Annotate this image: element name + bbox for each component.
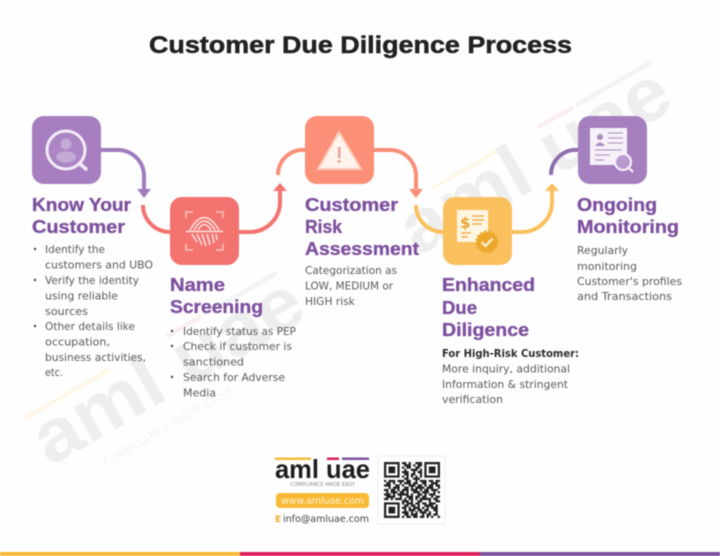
bullet list: sources [45,306,88,318]
connector: into ongoing monitoring [551,150,578,175]
heading: Screening [170,296,263,317]
heading [170,274,263,317]
bullet list: Search for Adverse [183,372,285,384]
bullet list: etc. [45,367,63,379]
description: Categorization as [305,265,397,277]
description [577,245,682,303]
arrow: risk assessment to enhanced due diligence [278,150,423,198]
bullet list: occupation, [45,336,110,348]
panel: customer risk assessment [305,116,419,308]
bullet list: business activities, [45,352,146,364]
bullet list: Identify status as PEP [183,326,296,338]
description: LOW, MEDIUM or [305,280,394,292]
title: Customer Due Diligence Process [149,32,572,59]
footer logo: aml uae: COMPLIANCE MADE EASY [290,482,356,488]
heading: Customer [32,216,125,237]
icon: warning triangle [305,116,374,184]
panel: enhanced due diligence [442,197,579,406]
bullet list [171,326,296,400]
heading: Enhanced [442,274,535,295]
heading: Know Your [32,194,131,215]
heading: Ongoing [577,194,657,215]
watermark: lower left: COMPLIANCE MADE EASY [101,384,235,469]
heading: Assessment [305,238,419,259]
arrow: know your customer to name screening [101,150,151,198]
heading: Risk [305,216,343,237]
icon: fingerprint scan [170,197,239,265]
heading [32,194,131,237]
bullet list: using reliable [45,290,118,302]
heading: Diligence [442,319,529,340]
panel: know your customer [32,116,153,379]
description: Regularly [577,245,628,257]
email: E [275,515,281,525]
website pill [276,493,369,508]
icon: document with badge [443,197,512,265]
website pill: www.amluae.com [281,496,364,507]
description [442,348,579,406]
bullet list: Other details like [45,321,135,333]
description: and Transactions [577,291,672,303]
icon: magnifier with person [32,116,101,184]
description: monitoring [577,261,637,273]
panel: name screening [170,197,296,400]
description: Customer's profiles [577,276,682,288]
heading: Monitoring [577,216,679,237]
heading [577,194,679,237]
icon: profile document with magnifier [578,116,647,184]
bullet list: Verify the identity [45,275,139,287]
heading [442,274,535,340]
qr code [378,456,445,524]
bullet list: customers and UBO [45,260,153,272]
watermark: upper right: aml uae [383,48,685,271]
bullet list: Check if customer is [183,341,292,353]
panel: ongoing monitoring [577,116,682,303]
bullet list: Identify the [45,244,105,256]
description: For High-Risk Customer: [442,348,579,360]
bottom colour bar [0,552,720,556]
footer logo: aml uae: aml uae [275,454,370,484]
heading: Name [170,274,225,295]
description: Information & stringent [442,379,568,391]
bullet list: Media [183,388,216,400]
arrow: name screening to risk assessment [143,183,287,232]
heading: Due [442,297,477,318]
heading [305,194,419,259]
heading: Customer [305,194,398,215]
bullet list [34,244,153,379]
description: HIGH risk [305,296,355,308]
description [305,265,397,308]
description: verification [442,394,503,406]
description: More inquiry, additional [442,364,570,376]
watermark: lower left: aml uae [16,258,318,481]
email: info@amluae.com [283,514,369,525]
bullet list: sanctioned [183,356,244,368]
icon: document with badge: $ [460,214,470,232]
arrow: enhanced due diligence to ongoing monitoring [416,183,559,232]
